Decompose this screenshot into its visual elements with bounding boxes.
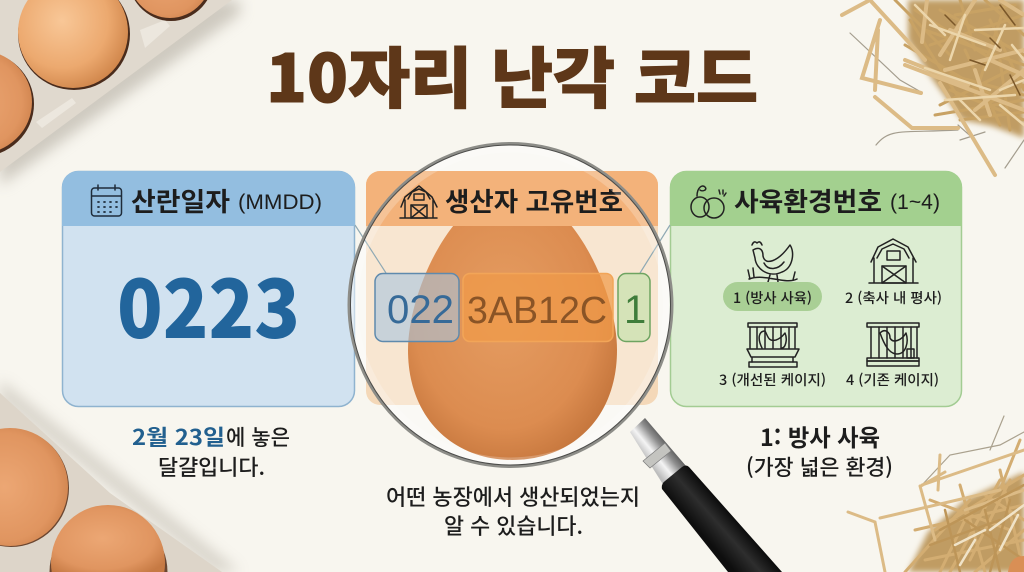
code box: 1: 1 <box>624 288 646 332</box>
code box: 022: 022 <box>387 288 454 332</box>
icon: free range hen <box>748 242 797 282</box>
code box: 3AB12C: 3AB12C <box>467 290 607 332</box>
icon: calendar <box>92 185 122 216</box>
lens header band <box>366 171 658 226</box>
caption: environment: 1: 방사 사육 <box>760 419 880 453</box>
icon: eggs <box>691 186 726 218</box>
code box: 3AB12C <box>463 274 613 342</box>
magnifier handle <box>630 418 782 572</box>
egg carton bottom left <box>0 380 240 572</box>
label: option 3: 3 (개선된 케이지) <box>719 370 826 390</box>
icon: enriched cage <box>747 323 799 367</box>
caption: date <box>132 421 290 482</box>
panel: environment <box>670 171 962 406</box>
pill: selected option <box>723 282 822 311</box>
icon: conventional cage <box>867 323 919 366</box>
value: 0223: 0223 <box>117 246 300 362</box>
lens glass <box>351 226 670 460</box>
panel: producer id <box>366 171 658 405</box>
magnifier ring <box>349 144 672 466</box>
icon: barn in header <box>400 186 437 218</box>
icon: barn <box>869 239 918 283</box>
heading: 사육환경번호: 사육환경번호 <box>734 182 882 219</box>
connector lines <box>355 225 670 273</box>
label: option 2: 2 (축사 내 평사) <box>845 288 942 308</box>
code box: 022 <box>375 274 459 342</box>
caption: environment <box>746 419 893 482</box>
caption: producer: 어떤 농장에서 생산되었는지 <box>386 480 640 512</box>
label: option 4: 4 (기존 케이지) <box>846 370 939 390</box>
heading unit: MMDD: (MMDD) <box>238 191 322 214</box>
straw top right <box>842 0 1024 175</box>
small egg behind straw <box>1008 556 1024 572</box>
egg carton top left <box>0 0 240 186</box>
egg <box>408 226 617 460</box>
label: option 1: 1 (방사 사육) <box>733 288 812 308</box>
caption: environment: (가장 넓은 환경) <box>746 451 893 482</box>
caption: date: 달걀입니다. <box>158 451 265 482</box>
code box: 1 <box>618 274 650 342</box>
title: 10자리 난각 코드 <box>266 26 758 122</box>
panel: egg-laying date <box>62 171 355 406</box>
straw bottom right <box>848 416 1024 572</box>
heading: 산란일자: 산란일자 <box>131 182 230 219</box>
caption: producer: 알 수 있습니다. <box>444 509 583 541</box>
heading: 생산자 고유번호: 생산자 고유번호 <box>445 182 623 219</box>
caption: producer <box>386 480 640 541</box>
heading unit: 1~4: (1~4) <box>890 191 940 214</box>
caption: date: 에 놓은 <box>226 421 290 452</box>
caption: date: 2월 23일 <box>132 421 225 452</box>
